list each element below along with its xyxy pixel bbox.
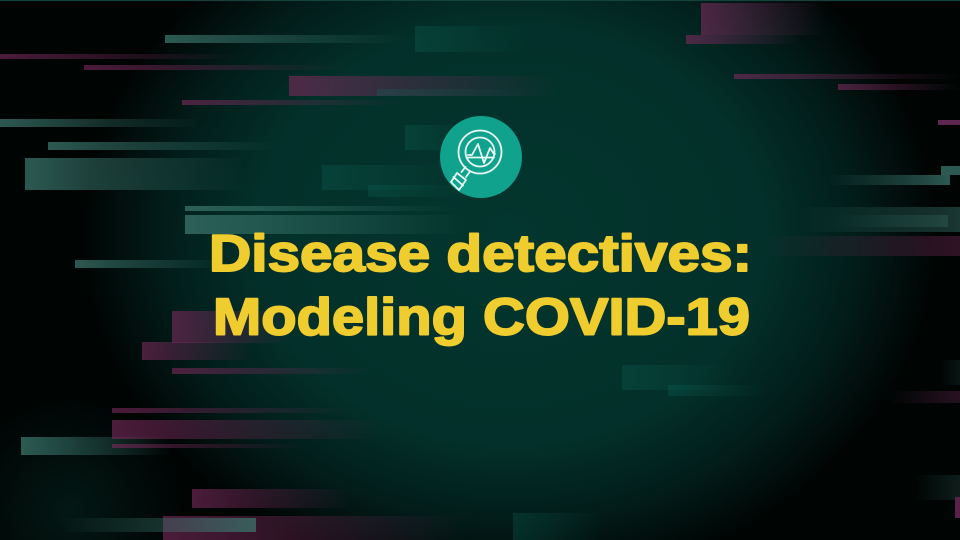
magenta streaks, left and centre [0,54,559,540]
title line 2: Modeling COVID-19 [213,288,750,346]
icon: magnifying glass over a pulse line [440,116,522,198]
streaks, right edge [686,3,960,518]
teal streaks, left and centre [0,26,768,540]
title [209,225,752,346]
title line 1: Disease detectives: [209,225,752,283]
